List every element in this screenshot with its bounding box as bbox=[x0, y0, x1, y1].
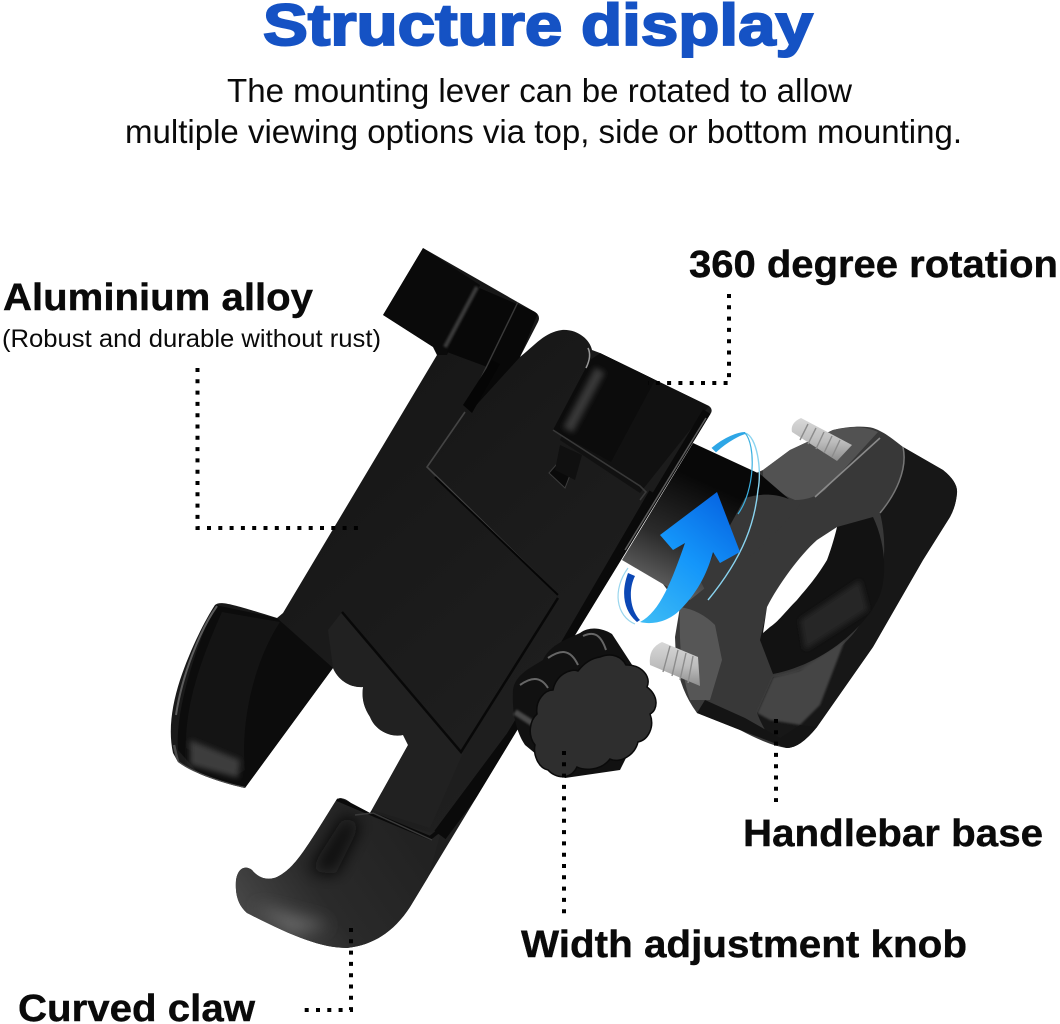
clamp upper ear bbox=[763, 427, 878, 500]
label: width adjustment knob: Width adjustment knob bbox=[521, 924, 967, 966]
label: handlebar base: Handlebar base bbox=[743, 813, 1043, 855]
label: aluminium alloy: (Robust and durable without rust) bbox=[2, 325, 381, 353]
arrow body bbox=[640, 492, 740, 623]
raised plate edge bbox=[427, 412, 558, 595]
subtitle bbox=[125, 72, 962, 150]
clamp lower ear bbox=[680, 607, 722, 700]
leader: 360 degree rotation bbox=[648, 294, 729, 383]
slot bbox=[463, 367, 490, 413]
handlebar base clamp bbox=[650, 418, 957, 748]
top clip shading bbox=[383, 248, 480, 355]
rotation ring bbox=[708, 433, 759, 600]
lower screw bbox=[650, 642, 700, 686]
upper-left claw shading bbox=[178, 605, 333, 788]
phone holder body bbox=[171, 248, 712, 960]
lower tab bbox=[333, 668, 408, 792]
seam bbox=[880, 447, 904, 513]
subtitle: The mounting lever can be rotated to allow bbox=[227, 72, 852, 109]
right side edge bbox=[440, 413, 709, 835]
hole opening bbox=[763, 527, 837, 633]
right end band bbox=[757, 447, 957, 748]
mounting tube bbox=[622, 443, 790, 600]
width adjustment knob bbox=[513, 629, 656, 778]
product: phone holder and handlebar mount bbox=[171, 248, 957, 960]
lower claw shading bbox=[236, 798, 428, 948]
leader: aluminium alloy bbox=[198, 368, 358, 528]
upper screw bbox=[792, 418, 852, 461]
knob face bbox=[530, 655, 656, 777]
small square window bbox=[549, 465, 570, 488]
upper right block and lever bbox=[560, 353, 709, 493]
subtitle: multiple viewing options via top, side or bottom mounting. bbox=[125, 113, 962, 150]
icon: blue rotation arrow bbox=[618, 433, 759, 624]
label: 360 degree rotation: 360 degree rotation bbox=[689, 244, 1058, 286]
clamp hole bbox=[760, 517, 884, 674]
leader: width adjustment knob bbox=[562, 751, 566, 914]
leader: curved claw bbox=[303, 928, 351, 1010]
label: aluminium alloy bbox=[2, 277, 381, 353]
ring back bbox=[624, 573, 640, 622]
label: aluminium alloy: Aluminium alloy bbox=[3, 277, 313, 319]
leader: handlebar base bbox=[774, 719, 778, 802]
